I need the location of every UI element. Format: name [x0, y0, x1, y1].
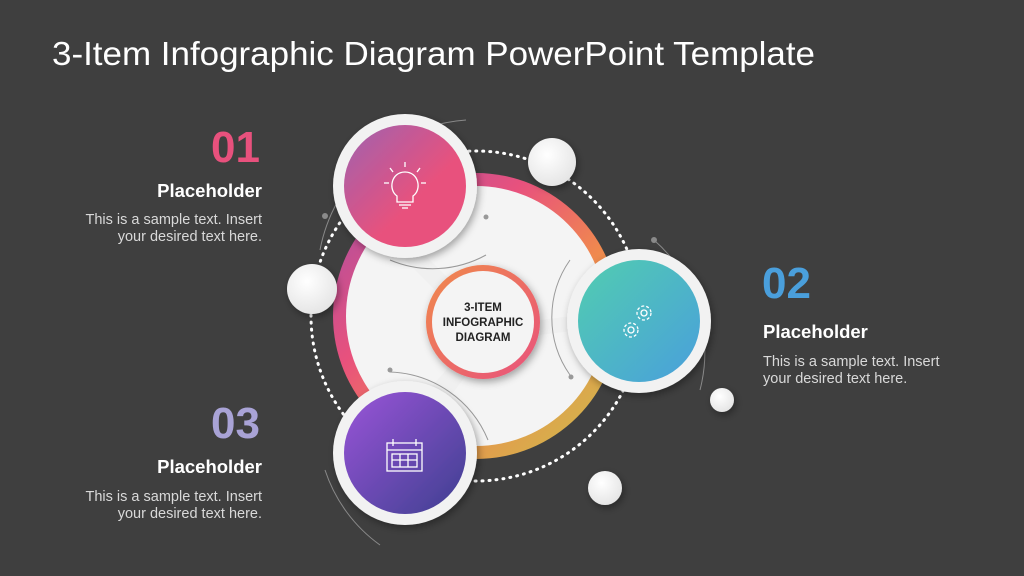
center badge: INFOGRAPHIC	[443, 317, 523, 329]
text block 03: 03	[211, 399, 260, 448]
item 3 circle	[333, 381, 477, 525]
text block 03	[86, 399, 262, 522]
text block 02: This is a sample text. Insert	[763, 354, 939, 370]
text block 01: your desired text here.	[118, 229, 262, 245]
text block 01	[86, 123, 262, 245]
item 1 circle	[333, 114, 477, 258]
decorative balls	[287, 138, 734, 505]
text block 02: your desired text here.	[763, 371, 907, 387]
center badge: 3-ITEM	[464, 302, 502, 314]
item 2 circle	[567, 249, 711, 393]
icon: gears	[624, 306, 651, 337]
text block 02: 02	[762, 259, 811, 308]
center badge: DIAGRAM	[456, 332, 510, 344]
diagram	[287, 114, 734, 545]
icon: calendar	[387, 439, 422, 471]
text block 01: 01	[211, 123, 260, 172]
ring	[333, 173, 619, 459]
icon: bulb	[384, 162, 426, 208]
text block 03: your desired text here.	[118, 506, 262, 522]
title: 3-Item Infographic Diagram PowerPoint Template	[52, 35, 815, 72]
text block 03: This is a sample text. Insert	[86, 489, 262, 505]
text block 02: Placeholder	[763, 321, 868, 342]
text block 02	[762, 259, 939, 387]
text block 01: This is a sample text. Insert	[86, 212, 262, 228]
center badge	[426, 265, 540, 379]
text block 01: Placeholder	[157, 180, 262, 201]
text block 03: Placeholder	[157, 456, 262, 477]
connectors	[405, 250, 470, 310]
